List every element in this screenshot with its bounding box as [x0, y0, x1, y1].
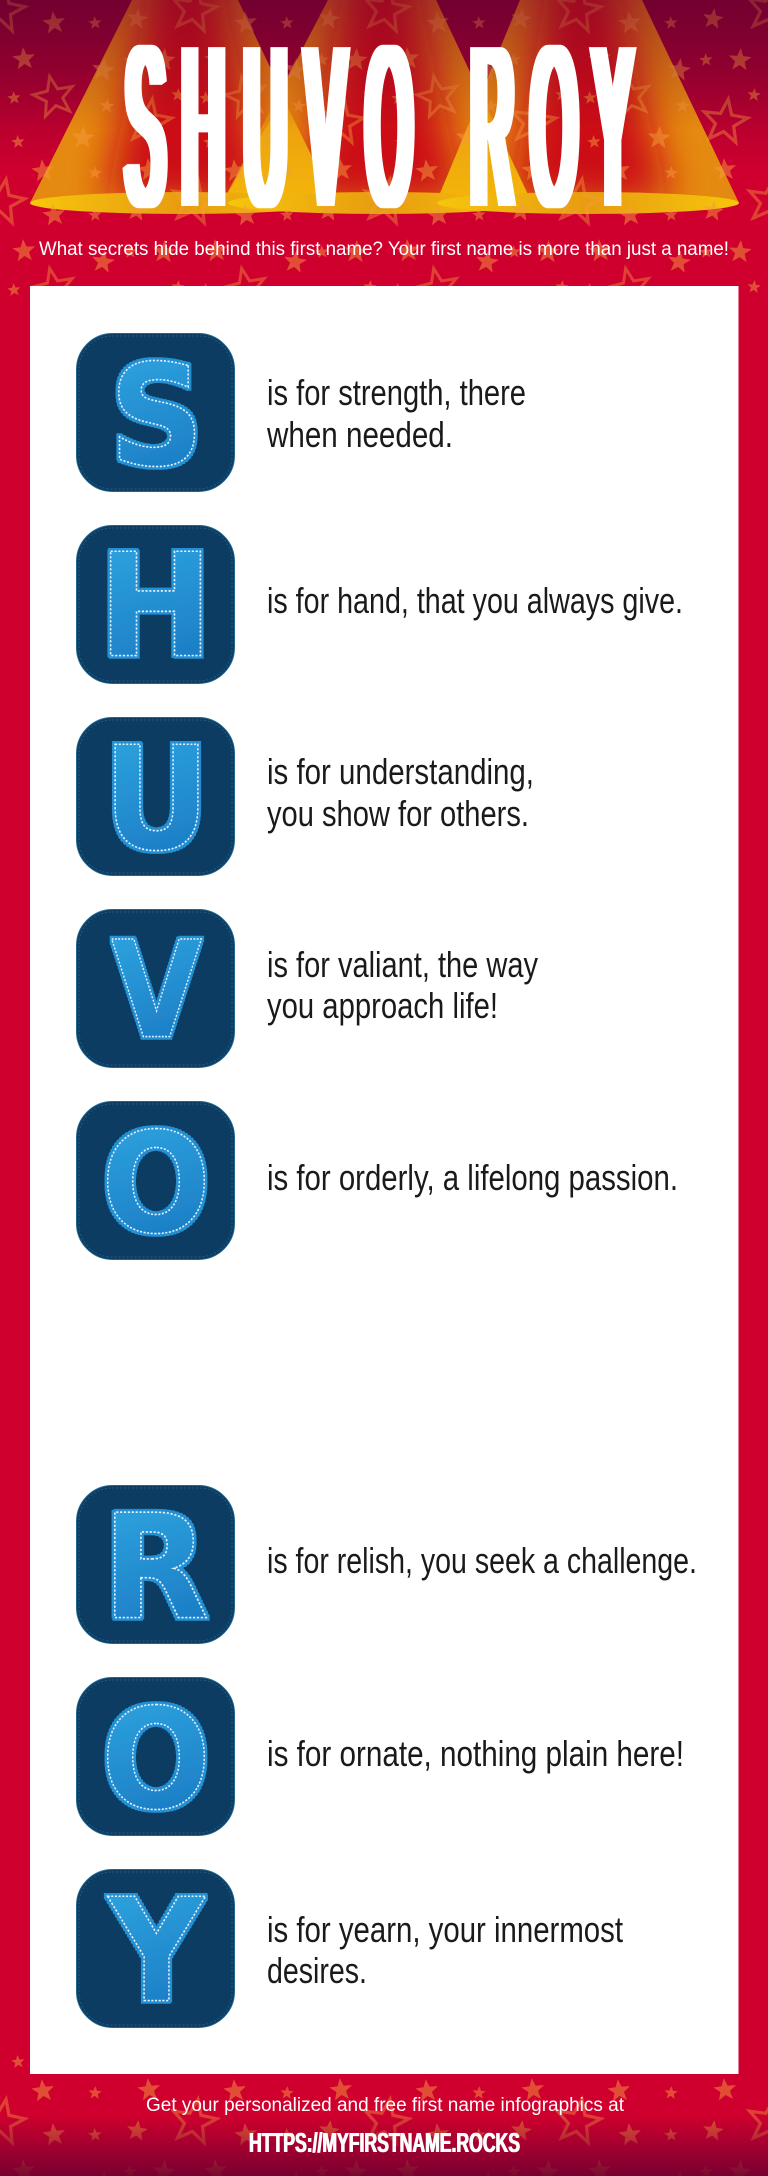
icon: letter U: U — [103, 716, 210, 883]
star pattern: top — [0, 0, 768, 300]
row: letter H — [76, 524, 683, 690]
background top shade — [0, 0, 768, 170]
footer url: HTTPS://MYFIRSTNAME.ROCKS — [249, 2127, 520, 2158]
icon: second letter O: O — [101, 1679, 211, 1841]
text: U line: is for understanding, — [267, 751, 534, 792]
icon: letter O — [76, 1102, 234, 1265]
text: U line: you show for others. — [267, 793, 529, 834]
icon: letter S — [76, 334, 234, 499]
footer tagline: Get your personalized and free first name infographics at — [146, 2095, 625, 2116]
icon: letter S: S — [109, 336, 204, 499]
text: S line: is for strength, there — [267, 372, 526, 413]
text: O line: is for orderly, a lifelong passion. — [267, 1157, 678, 1198]
icon: letter V — [76, 910, 234, 1068]
spotlights — [30, 0, 739, 214]
star pattern: bottom — [0, 2054, 768, 2176]
icon: letter U — [76, 716, 234, 883]
row: letter U — [76, 716, 534, 883]
row: letter O — [76, 1102, 678, 1265]
text: second O line: is for ornate, nothing plain here! — [267, 1733, 684, 1774]
top shade — [0, 0, 768, 130]
row: second letter O — [76, 1678, 684, 1841]
subtitle: What secrets hide behind this first name? Your first name is more than just a name! — [39, 238, 729, 260]
icon: letter H: H — [98, 524, 213, 690]
icon: letter V: V — [111, 912, 202, 1068]
text: V line: is for valiant, the way — [267, 944, 539, 985]
bottom shade — [0, 2115, 768, 2176]
icon: letter Y: Y — [107, 1868, 206, 2035]
icon: letter R: R — [102, 1485, 209, 1652]
text: S line: when needed. — [266, 414, 453, 455]
row: letter R — [76, 1485, 697, 1652]
text: V line: you approach life! — [267, 985, 498, 1026]
row: letter V — [76, 910, 539, 1068]
row: letter S — [76, 334, 526, 499]
icon: letter R — [76, 1485, 234, 1652]
icon: letter O: O — [101, 1103, 211, 1265]
row: letter Y — [76, 1868, 623, 2035]
title: SHUVO ROY — [126, 0, 632, 255]
text: Y line: desires. — [267, 1950, 367, 1991]
icon: second letter O — [76, 1678, 234, 1841]
text: Y line: is for yearn, your innermost — [267, 1909, 623, 1950]
icon: letter Y — [76, 1868, 234, 2035]
panel: white content card — [30, 286, 738, 2074]
